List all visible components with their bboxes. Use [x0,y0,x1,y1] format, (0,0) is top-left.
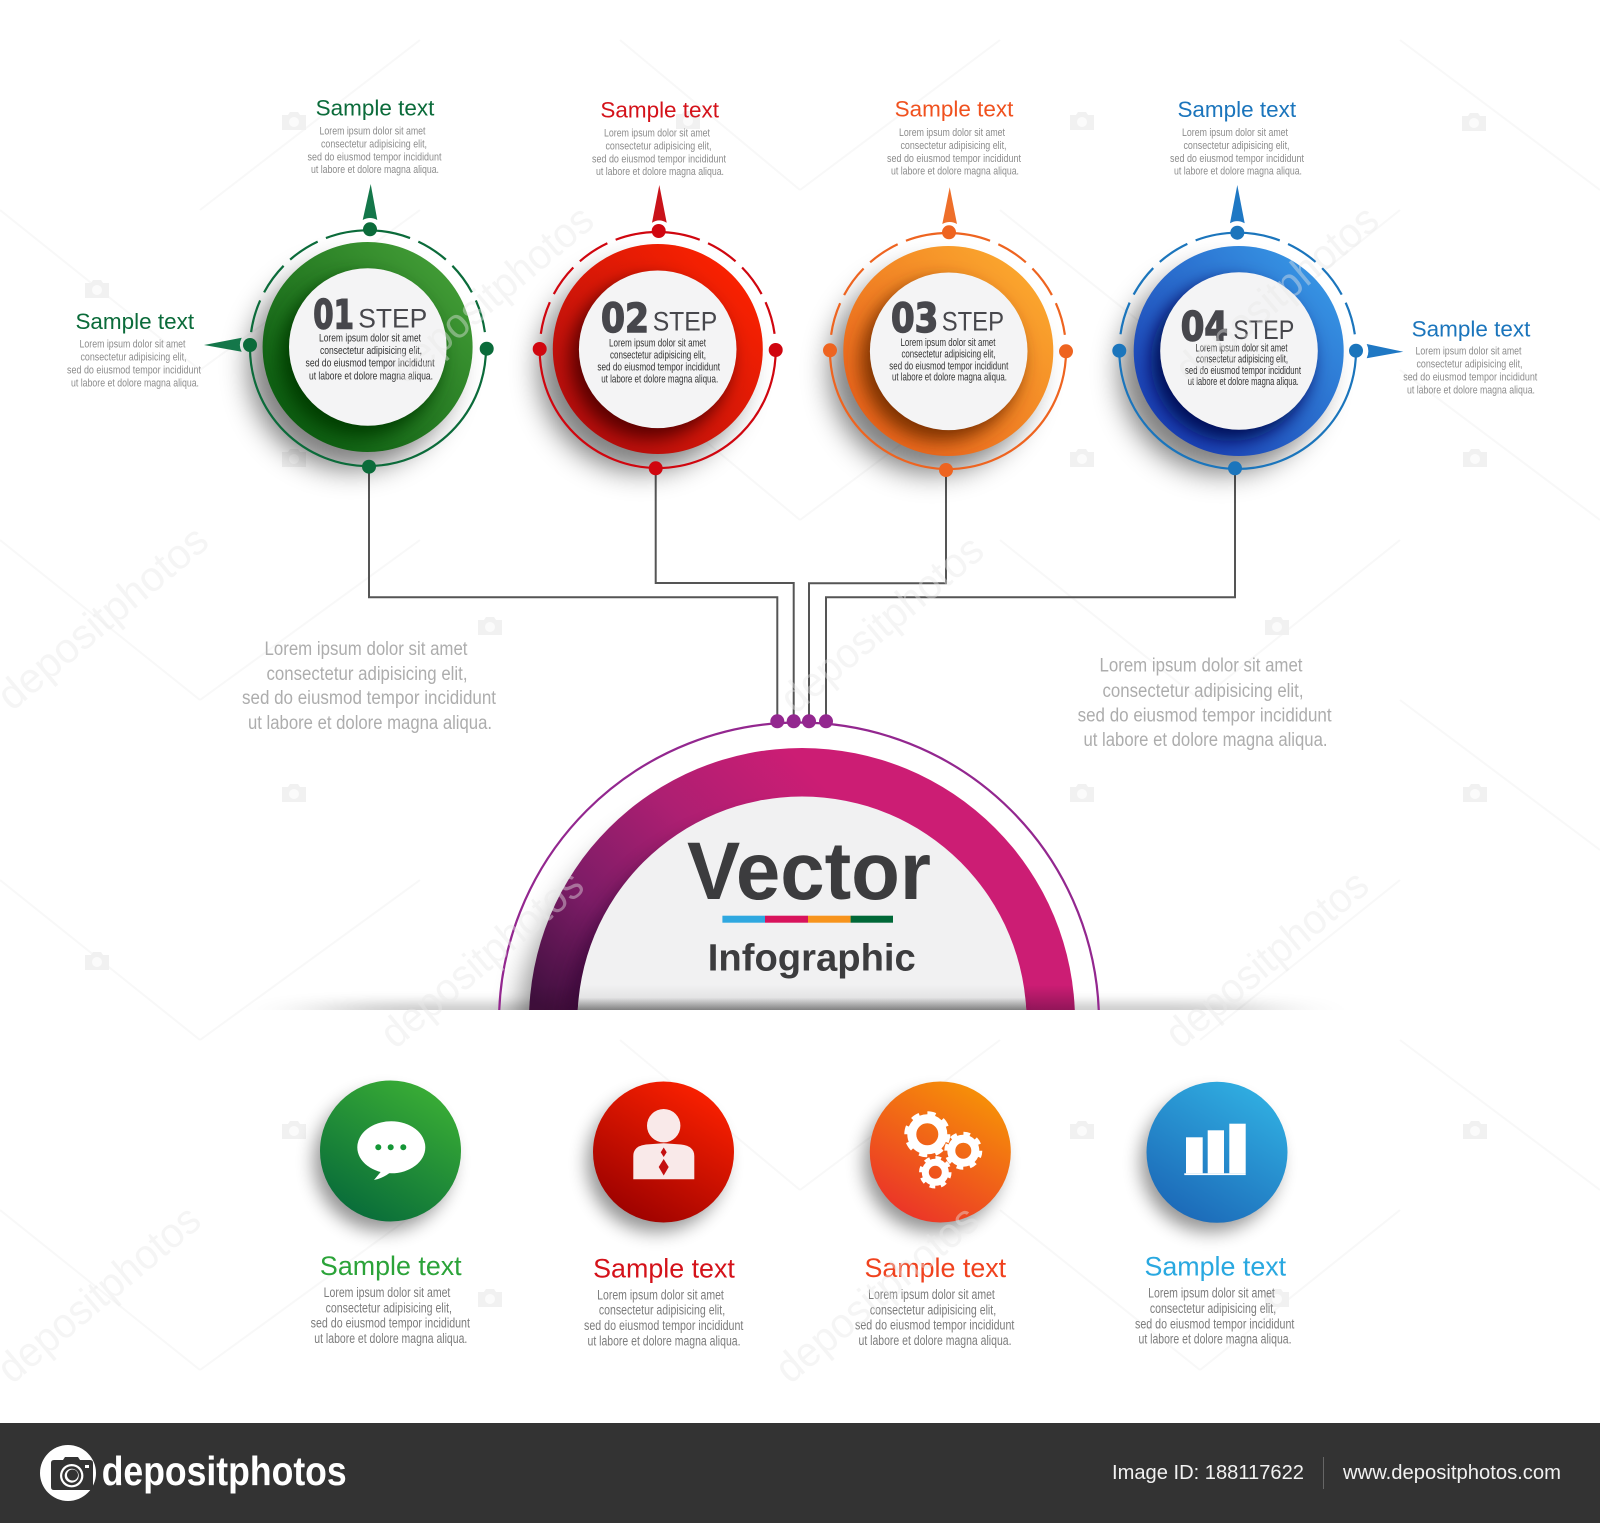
text block: orange top: sed do eiusmod tempor incididunt [887,153,1021,165]
ring bottom shade [529,988,1075,1010]
text block: red top: Sample text [600,98,720,123]
card text: ut labore et dolore magna aliqua. [858,1333,1012,1348]
center disc [870,272,1028,430]
pointer top [1230,185,1245,223]
ring shadow [249,265,453,469]
card text: sed do eiusmod tempor incididunt [311,1316,470,1331]
outer dashed ring [830,233,1066,469]
icon shadow [587,1094,725,1232]
card text: sed do eiusmod tempor incididunt [855,1318,1015,1333]
card text: Lorem ipsum dolor sit amet [868,1287,995,1302]
card text: consectetur adipisicing elit, [599,1303,725,1318]
center text: sed do eiusmod tempor incididunt [1185,365,1301,377]
ring shadow [539,267,743,471]
card text: consectetur adipisicing elit, [326,1300,452,1315]
text block: green top: Sample text [316,96,435,121]
step number: 04 [1181,305,1228,351]
subtitle: Infographic: Infographic [708,938,916,980]
icon disc [320,1080,461,1222]
node dots [1112,226,1363,475]
text block: orange top: Lorem ipsum dolor sit amet [899,127,1005,139]
center text: Lorem ipsum dolor sit amet [609,338,706,350]
text block: grey left: Lorem ipsum dolor sit amet [264,639,468,660]
text block: green top: ut labore et dolore magna aliqua. [311,164,439,176]
text block: grey right [1078,656,1332,751]
icon disc [1146,1082,1288,1223]
text block: grey right: Lorem ipsum dolor sit amet [1100,656,1303,676]
inner shadow [861,281,1021,441]
text block: green top: consectetur adipisicing elit, [321,138,427,150]
pointer top [652,185,667,223]
thin arch outline [498,721,1100,1010]
text block: blue top: ut labore et dolore magna aliqua. [1174,166,1302,178]
text block: orange top: ut labore et dolore magna aliqua. [891,166,1019,178]
card text: Lorem ipsum dolor sit amet [597,1287,724,1302]
card text: consectetur adipisicing elit, [1150,1301,1276,1316]
step word: STEP [358,303,427,333]
center text: ut labore et dolore magna aliqua. [309,370,433,382]
panel: step 3 orange [823,187,1073,477]
text block: green top [308,96,442,176]
node dots [823,225,1073,477]
footer bar [0,1423,1600,1523]
center text: sed do eiusmod tempor incididunt [889,360,1008,372]
logo: wordmark: depositphotos [102,1448,347,1494]
inner disc [578,796,1026,1010]
text block: red top: sed do eiusmod tempor incididunt [592,153,726,165]
connector lines [369,468,1235,721]
text block: green left: Sample text [75,309,195,334]
center text: ut labore et dolore magna aliqua. [892,372,1007,384]
text block: grey right: sed do eiusmod tempor incididunt [1078,706,1332,726]
arch left shadow [501,830,607,1010]
card text [584,1287,744,1348]
text block: green left: ut labore et dolore magna aliqua. [71,378,199,390]
icon: gears [907,1114,980,1186]
center text [306,333,434,382]
watermark text: depositphotos [766,1195,987,1392]
center text [597,338,720,385]
panel: step 2 red [533,185,783,475]
card text: consectetur adipisicing elit, [870,1302,996,1317]
text block: red top: consectetur adipisicing elit, [606,140,712,152]
ring shadow [1120,269,1324,473]
text block: grey left: consectetur adipisicing elit, [266,664,468,685]
icon: speech bubble [357,1121,425,1180]
image id: Image ID: 188117622 [1112,1462,1304,1484]
center disc [289,268,447,426]
ring shadow [830,269,1034,473]
card title: Sample text [320,1251,462,1281]
text block: green left: Lorem ipsum dolor sit amet [80,339,186,351]
text block: green left [67,309,201,390]
center text: consectetur adipisicing elit, [320,345,422,357]
text block: green left: sed do eiusmod tempor incididunt [67,365,201,377]
pointer top [363,184,377,220]
card text: ut labore et dolore magna aliqua. [588,1333,740,1348]
center disc [1160,272,1318,430]
center text [889,337,1008,384]
text block: orange top: Sample text [895,97,1014,122]
center text: Lorem ipsum dolor sit amet [1196,343,1288,355]
card text: sed do eiusmod tempor incididunt [1135,1316,1295,1331]
icon shadow [864,1094,1002,1232]
ring inner shade [564,824,694,1010]
inner shadow [280,277,440,437]
text block: blue right: Lorem ipsum dolor sit amet [1416,346,1522,358]
text block: grey left [242,639,497,734]
watermark text: depositphotos [371,860,592,1057]
panel: central arch [292,558,1298,1010]
step number: 03 [891,296,938,342]
outer dashed ring [540,232,776,468]
node dots [533,224,783,475]
text block: orange top [887,97,1021,178]
center text: sed do eiusmod tempor incididunt [306,358,434,370]
connector nodes [770,714,833,728]
step word: STEP [942,307,1004,337]
text block: blue right: ut labore et dolore magna aliqua. [1407,385,1535,397]
thick ring [843,246,1053,456]
text block: orange top: consectetur adipisicing elit, [900,140,1006,152]
watermark text: depositphotos [381,195,602,392]
text block: red top: Lorem ipsum dolor sit amet [604,127,710,139]
inner shadow [570,279,730,439]
thick ring [553,244,763,454]
text block: blue top: sed do eiusmod tempor incididunt [1170,153,1304,165]
panel: icon card blue [1135,1082,1295,1347]
icon: person with tie [633,1109,694,1179]
step number: 02 [601,296,649,342]
icon disc [870,1082,1011,1222]
panel: step 1 green [204,184,494,474]
card title: Sample text [1144,1252,1287,1282]
outer dashed ring [1119,233,1356,469]
watermark text [0,195,1387,1392]
text block: blue top: Sample text [1177,97,1297,122]
text block: green top: sed do eiusmod tempor incididunt [308,151,442,163]
text block: blue right: consectetur adipisicing elit, [1416,359,1522,371]
icon shadow [1141,1094,1279,1232]
step word: STEP [1233,315,1294,345]
text block: green left: consectetur adipisicing elit, [80,352,186,364]
center text: Lorem ipsum dolor sit amet [319,333,421,345]
disc bottom shade [578,993,1026,1010]
panel: icon card orange [855,1082,1015,1348]
text block: blue top [1170,97,1304,178]
card text: Lorem ipsum dolor sit amet [1148,1286,1275,1301]
icon: bar chart [1184,1124,1246,1175]
panel: step 4 blue [1112,185,1403,475]
title: Vector: Vector [687,826,931,917]
text block: red top [592,98,726,178]
text block: blue right: Sample text [1412,316,1531,341]
card text: sed do eiusmod tempor incididunt [584,1318,744,1333]
center text: ut labore et dolore magna aliqua. [1188,376,1299,388]
card title: Sample text [593,1253,735,1283]
card text [855,1287,1015,1348]
center text: consectetur adipisicing elit, [1196,354,1288,366]
text block: green top: Lorem ipsum dolor sit amet [320,125,426,137]
text block: blue right [1403,316,1537,397]
icon shadow [314,1093,452,1231]
center disc [579,270,736,428]
text block: red top: ut labore et dolore magna aliqua. [596,166,724,178]
node dots [243,222,494,474]
text block: blue right: sed do eiusmod tempor incididunt [1403,372,1537,384]
text block: blue top: consectetur adipisicing elit, [1184,140,1290,152]
text block: grey right: ut labore et dolore magna aliqua. [1084,730,1328,751]
icon disc [593,1082,734,1222]
pointer left [204,338,242,352]
inner shadow [1151,281,1311,441]
text block: grey right: consectetur adipisicing elit, [1102,681,1304,702]
step number: 01 [313,292,354,338]
card text: Lorem ipsum dolor sit amet [324,1285,451,1300]
step word: STEP [653,307,717,337]
center text: consectetur adipisicing elit, [902,348,996,360]
colour rule [722,916,893,923]
text block: grey left: sed do eiusmod tempor incididunt [242,688,497,709]
panel: icon card red [584,1082,744,1348]
card text: ut labore et dolore magna aliqua. [1138,1332,1292,1347]
text block: grey left: ut labore et dolore magna aliqua. [248,713,492,734]
center text [1185,343,1301,388]
outer dashed ring [250,230,486,466]
center text: Lorem ipsum dolor sit amet [900,337,996,349]
card text [1135,1286,1295,1347]
panel: icon card green [311,1080,470,1346]
thick ring [263,242,473,452]
card title: Sample text [864,1253,1007,1283]
pointer top [942,187,957,224]
pointer right [1367,344,1403,358]
base shadow [330,1005,1260,1017]
watermark text: depositphotos [1156,860,1377,1057]
thick ring [1134,246,1344,456]
logo: camera badge [40,1445,96,1501]
watermark text: depositphotos [1166,195,1387,392]
text block: blue top: Lorem ipsum dolor sit amet [1182,127,1288,139]
magenta ring [529,748,1075,1010]
site url: www.depositphotos.com [1342,1462,1561,1484]
center text: ut labore et dolore magna aliqua. [601,373,718,385]
center text: sed do eiusmod tempor incididunt [597,362,720,374]
card text: ut labore et dolore magna aliqua. [314,1331,467,1346]
card text [311,1285,470,1346]
center text: consectetur adipisicing elit, [610,349,706,361]
watermark text: depositphotos [771,525,992,722]
